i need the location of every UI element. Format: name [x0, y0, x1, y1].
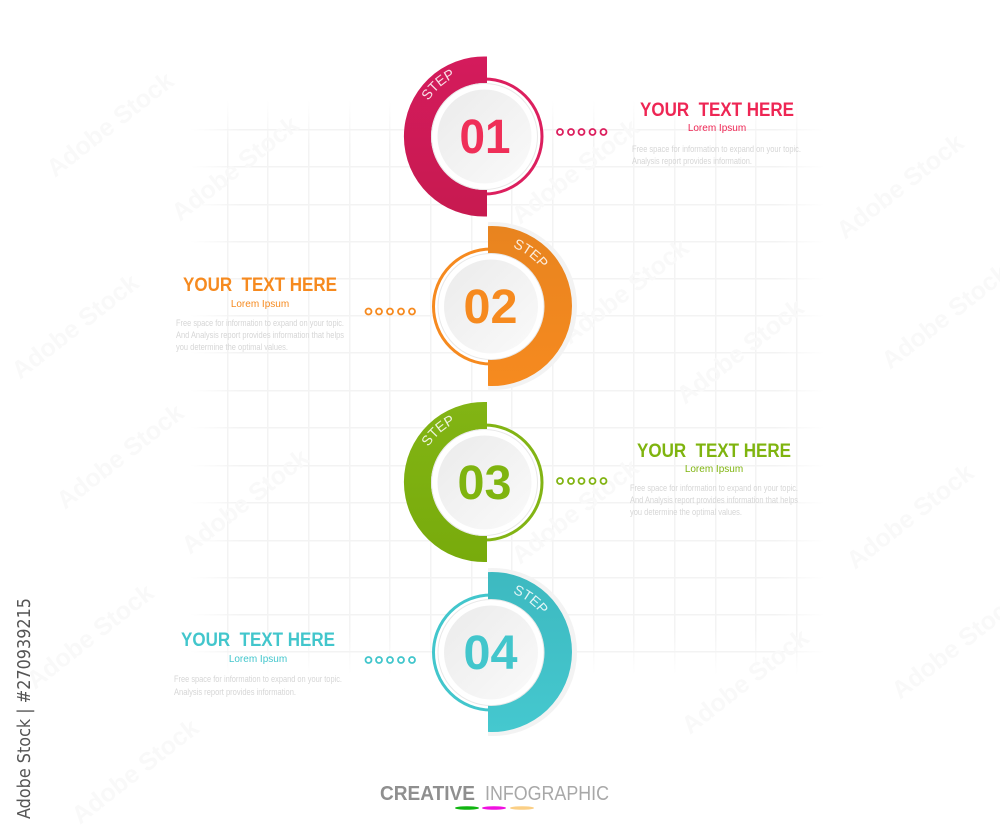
- step 01 text: Analysis report provides information.: [632, 156, 752, 166]
- step 02 text: Free space for information to expand on your topic.: [176, 318, 344, 328]
- watermarks: Adobe Stock: [676, 624, 814, 740]
- background grid: [190, 100, 825, 675]
- thick arc: [404, 402, 487, 562]
- step 02 text: And Analysis report provides information that helps: [176, 330, 344, 340]
- step 03 text: And Analysis report provides information that helps: [630, 495, 798, 505]
- ring: [434, 595, 548, 710]
- watermarks: Adobe Stock: [831, 129, 969, 245]
- step 01 dots: [557, 129, 606, 135]
- number: 03: [458, 457, 512, 510]
- number: 01: [460, 111, 510, 164]
- watermarks: Adobe Stock: [506, 454, 644, 570]
- step 04 text: YOUR TEXT HERE: [181, 630, 335, 651]
- shadow: [488, 568, 577, 736]
- step 01 text: YOUR TEXT HERE: [640, 100, 794, 121]
- ring: [427, 425, 542, 540]
- watermarks: Adobe Stock: [506, 114, 644, 230]
- step label: STEP: [514, 586, 548, 611]
- step 01 text: Lorem Ipsum: [688, 123, 746, 134]
- step 04 dots: [366, 657, 415, 663]
- step 04 text: Free space for information to expand on your topic.: [174, 674, 342, 684]
- disc: [438, 600, 544, 706]
- footer title: INFOGRAPHIC: [485, 783, 609, 805]
- step 01 text: [632, 100, 801, 166]
- watermarks: Adobe Stock: [6, 269, 144, 385]
- watermarks: Adobe Stock: [556, 234, 694, 350]
- step 04 text: Analysis report provides information.: [174, 687, 296, 697]
- watermarks: Adobe Stock: [841, 459, 979, 575]
- footer title: CREATIVE: [380, 783, 475, 805]
- step 03 text: Lorem Ipsum: [685, 464, 743, 475]
- footer color marks: [455, 806, 534, 810]
- thick arc: [404, 57, 487, 217]
- step label: STEP: [422, 416, 452, 446]
- shadow: [488, 222, 577, 390]
- stock id: Adobe Stock | #270939215: [14, 598, 35, 819]
- number: 02: [464, 281, 518, 334]
- disc: [438, 254, 544, 360]
- step 04 circle: [432, 568, 577, 736]
- step 03 circle: [404, 402, 544, 562]
- step 03 text: you determine the optimal values.: [630, 507, 742, 517]
- step 02 text: Lorem Ipsum: [231, 299, 289, 310]
- watermarks: Adobe Stock: [51, 399, 189, 515]
- disc: [432, 84, 538, 190]
- watermarks: Adobe Stock: [66, 714, 204, 830]
- step 04 text: Lorem Ipsum: [229, 654, 287, 665]
- disc: [432, 430, 538, 536]
- step 02 text: [176, 275, 344, 352]
- step 02 dots: [366, 308, 415, 314]
- watermarks: Adobe Stock: [166, 111, 304, 227]
- ring: [427, 79, 542, 194]
- step 03 text: [630, 441, 798, 517]
- step 03 text: Free space for information to expand on your topic.: [630, 483, 798, 493]
- step 01 circle: [404, 56, 544, 216]
- footer title: [380, 783, 609, 810]
- thick arc: [488, 226, 572, 386]
- step 03 text: YOUR TEXT HERE: [637, 441, 791, 462]
- step label: STEP: [422, 70, 452, 100]
- watermarks: Adobe Stock: [176, 444, 314, 560]
- step 01 text: Free space for information to expand on your topic.: [632, 144, 801, 154]
- step 02 text: you determine the optimal values.: [176, 342, 288, 352]
- ring: [434, 249, 548, 364]
- thick arc: [488, 572, 572, 732]
- step 03 dots: [557, 478, 606, 484]
- step 02 circle: [432, 222, 577, 390]
- step label: STEP: [514, 240, 548, 265]
- step 02 text: YOUR TEXT HERE: [183, 275, 337, 296]
- watermarks: Adobe Stock: [671, 294, 809, 410]
- number: 04: [464, 627, 518, 680]
- watermarks: Adobe Stock: [41, 67, 179, 183]
- step 04 text: [174, 630, 342, 697]
- watermarks: Adobe Stock: [21, 579, 159, 695]
